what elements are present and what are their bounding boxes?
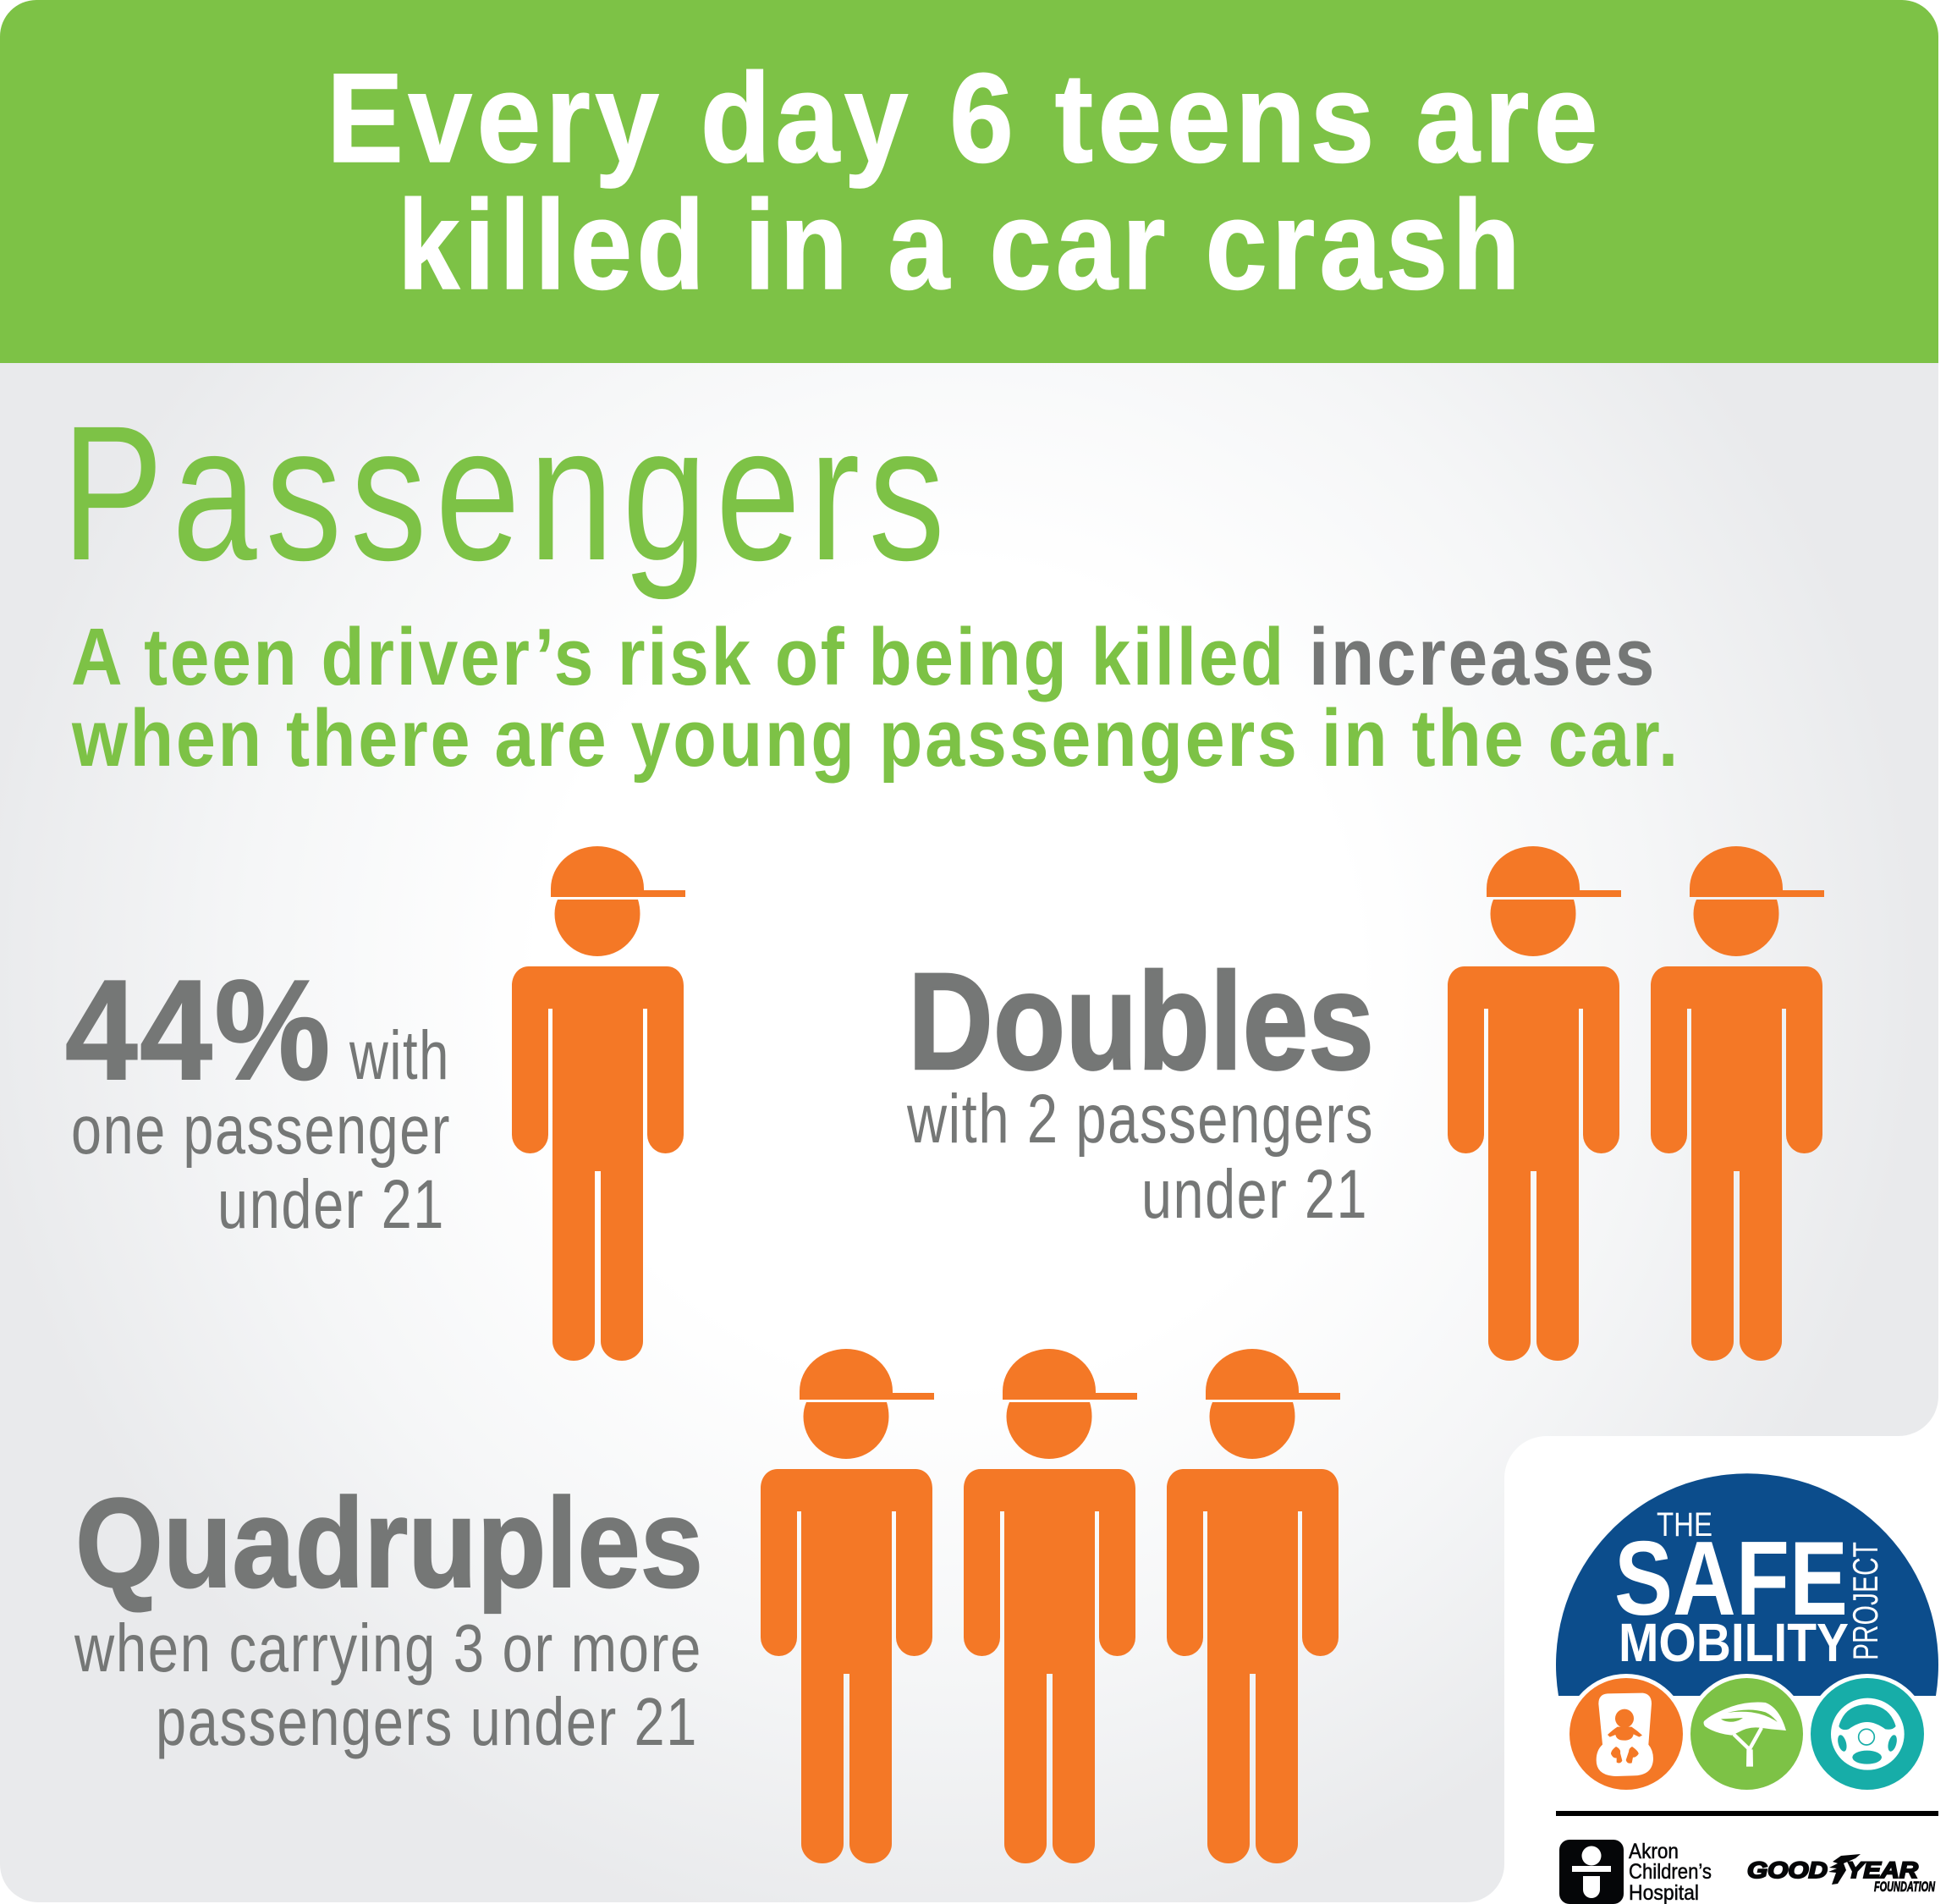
stat: Doubles with 2 passengers under 21 bbox=[906, 944, 1374, 1233]
stat: Quadruples when carrying 3 or more passengers under 21: Quadruples bbox=[75, 1472, 703, 1614]
stat: 44% with one passenger under 21: with bbox=[349, 1017, 450, 1094]
logo wordmark bbox=[1614, 1506, 1885, 1673]
stat: Quadruples when carrying 3 or more passengers under 21: when carrying 3 or more bbox=[74, 1610, 702, 1686]
divider rule bbox=[1556, 1811, 1938, 1816]
logo wordmark: PROJECT bbox=[1845, 1542, 1885, 1660]
logo wordmark: SAFE bbox=[1614, 1521, 1848, 1637]
stat: Doubles with 2 passengers under 21: under 21 bbox=[1141, 1156, 1368, 1233]
title line 1: Every day 6 teens are bbox=[327, 47, 1602, 189]
icon: one teen passenger bbox=[512, 846, 685, 1361]
stat: Quadruples when carrying 3 or more passengers under 21: passengers under 21 bbox=[156, 1684, 698, 1759]
logo wordmark: MOBILITY bbox=[1619, 1612, 1849, 1673]
subheading: when there are young passengers in the car. bbox=[71, 693, 1680, 784]
logo: Akron Children's Hospital bbox=[1559, 1840, 1712, 1904]
title line 2: killed in a car crash bbox=[398, 173, 1525, 316]
logo: Akron Children's Hospital: Akron bbox=[1629, 1840, 1679, 1863]
logo: The Safe Mobility Project bbox=[1556, 1473, 1938, 1794]
logo wordmark: THE bbox=[1657, 1506, 1712, 1544]
subheading bbox=[71, 612, 1680, 784]
stat: Doubles with 2 passengers under 21: with 2 passengers bbox=[906, 1081, 1374, 1158]
stat: 44% with one passenger under 21 bbox=[65, 950, 451, 1243]
icon: two teen passengers bbox=[1448, 846, 1824, 1361]
logo dome bbox=[1556, 1473, 1938, 1696]
subheading: A teen driver’s risk of being killed bbox=[71, 612, 1286, 702]
panel: green header bbox=[0, 0, 1938, 363]
logo: Goodyear Foundation bbox=[1747, 1854, 1935, 1895]
icon: steering wheel bbox=[1806, 1674, 1928, 1794]
logo: Goodyear Foundation: GOOD bbox=[1747, 1857, 1828, 1883]
icon: three teen passengers bbox=[761, 1349, 1340, 1863]
icon: bike helmet bbox=[1686, 1674, 1807, 1794]
stat: 44% with one passenger under 21: 44% bbox=[65, 950, 333, 1109]
subheading: increases bbox=[1309, 612, 1657, 702]
stat: 44% with one passenger under 21: under 21 bbox=[217, 1166, 445, 1243]
icon: child car seat bbox=[1565, 1674, 1687, 1794]
logo: Goodyear Foundation: YEAR bbox=[1846, 1857, 1919, 1883]
stat: Doubles with 2 passengers under 21: Doubles bbox=[908, 944, 1374, 1098]
heading: Passengers: Passengers bbox=[62, 387, 954, 601]
stat: 44% with one passenger under 21: one passenger bbox=[71, 1092, 451, 1169]
stat: Quadruples when carrying 3 or more passengers under 21 bbox=[74, 1472, 703, 1759]
logo: Akron Children's Hospital: Children’s bbox=[1629, 1860, 1712, 1884]
